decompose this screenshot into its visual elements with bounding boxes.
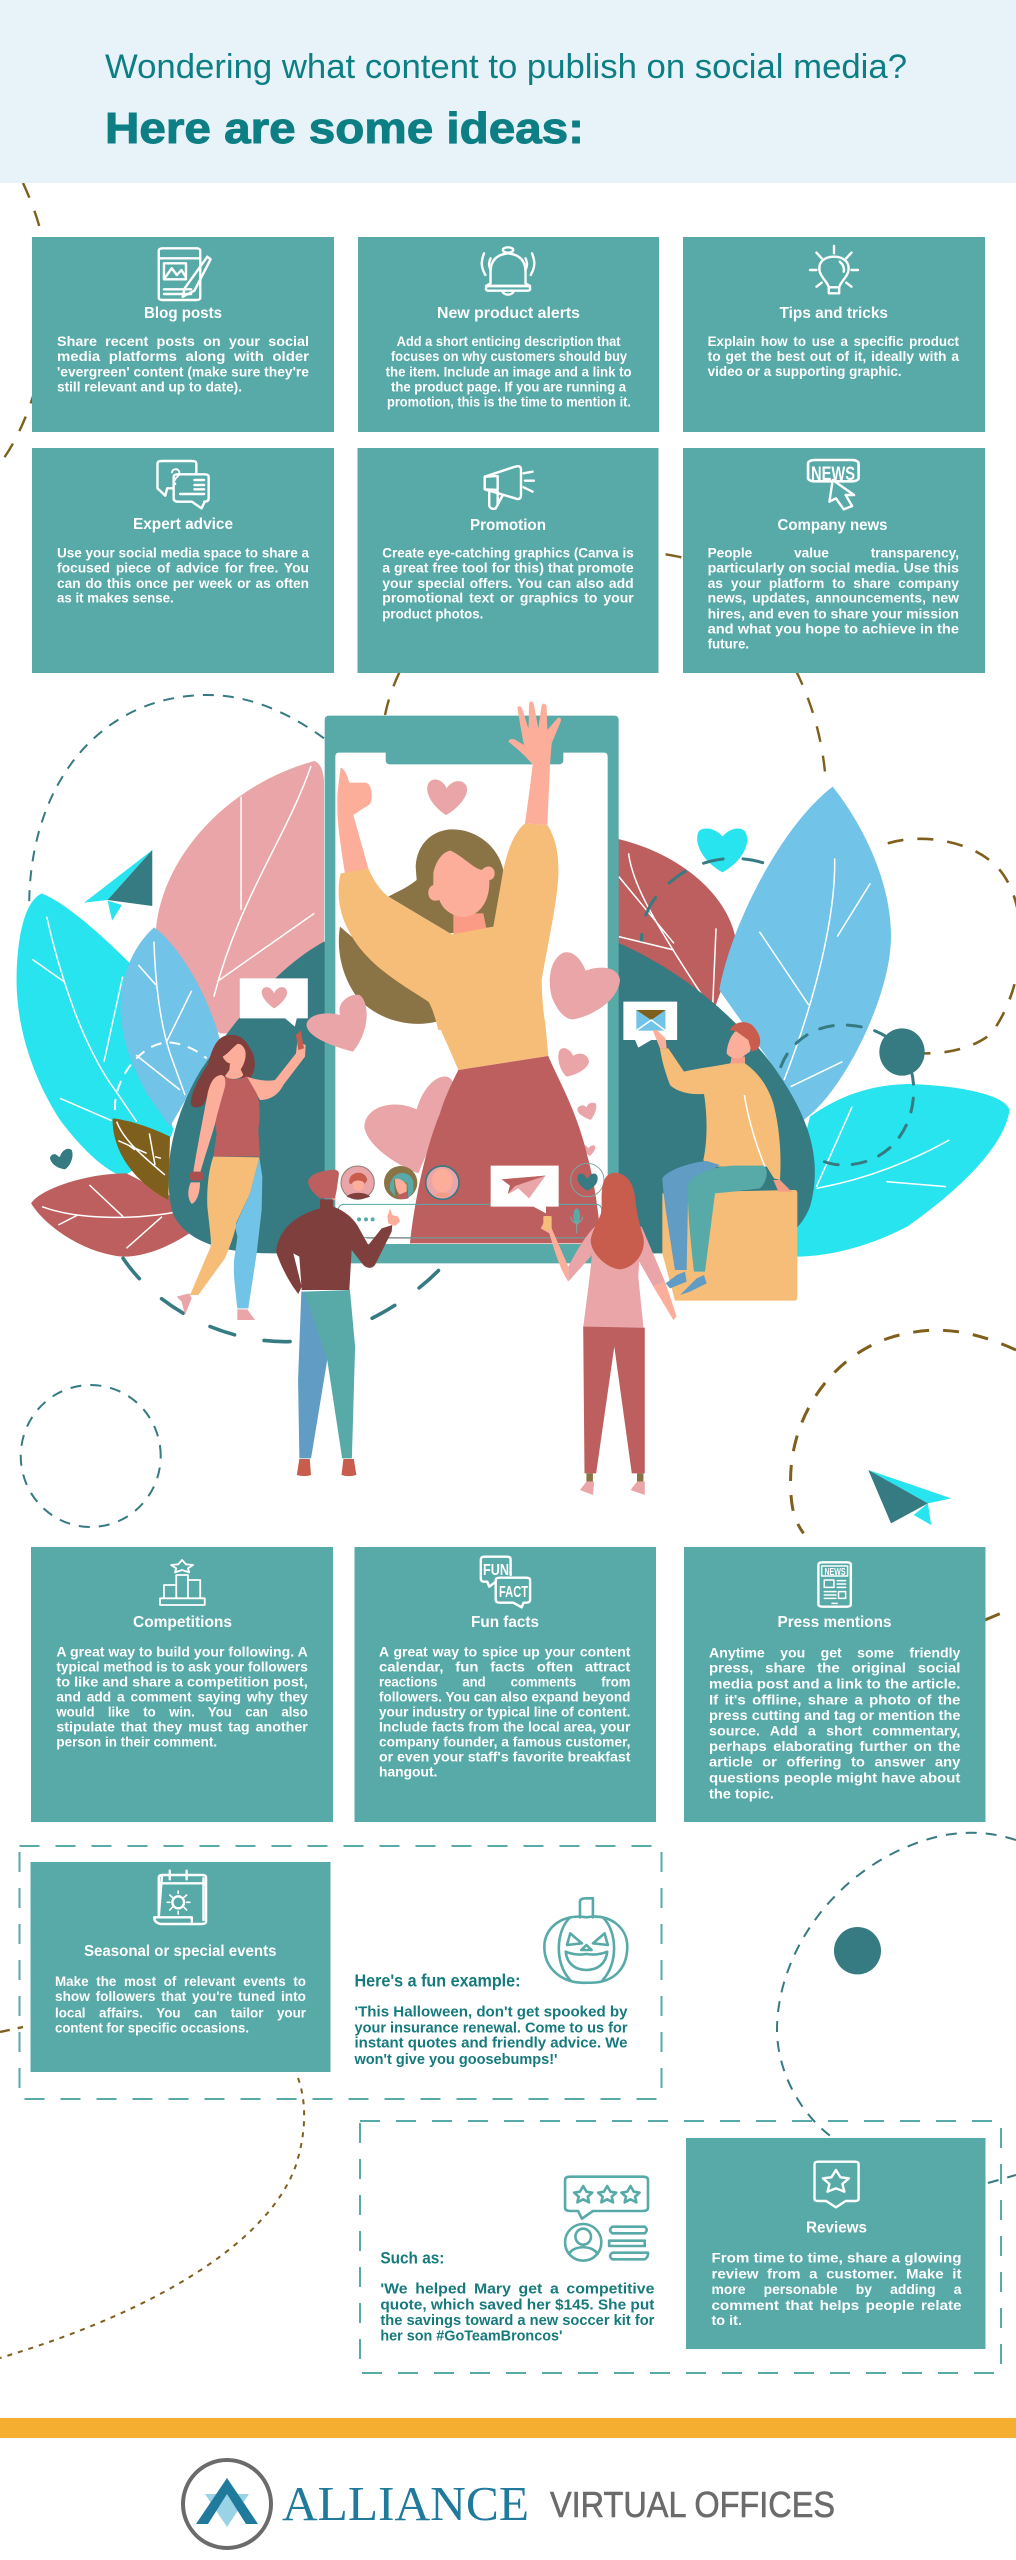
body text: media platforms along with older (57, 349, 310, 364)
leaf: cyan right (794, 1084, 1010, 1257)
teal dot right (879, 1028, 925, 1076)
body text: to like and share a competition post, (56, 1675, 308, 1690)
body text: typical method is to ask your followers (56, 1660, 308, 1675)
panel: blog posts (32, 237, 334, 432)
panel: company news (683, 448, 985, 673)
body text: 'evergreen' content (make sure they're (57, 364, 309, 380)
leaf: red behind phone right (616, 838, 737, 1013)
body text (57, 546, 309, 606)
body text: hangout. (379, 1764, 437, 1779)
body text: Create eye-catching graphics (Canva is (382, 546, 634, 561)
body text: your special offers. You can also add (382, 576, 634, 591)
icon: fun fact bubbles: FUN (483, 1562, 509, 1579)
dashed arc top right (888, 839, 1016, 1053)
footer logo (183, 2460, 835, 2548)
body text (708, 334, 959, 379)
icon: light bulb (810, 246, 858, 293)
heading: Blog posts (144, 305, 222, 322)
small hearts right (558, 1048, 596, 1156)
phone screen (335, 753, 608, 1244)
body text: promotional text or graphics to your (382, 591, 634, 606)
main woman on screen (337, 701, 561, 1030)
body text: Anytime you get some friendly (709, 1645, 961, 1660)
body text: more personable by adding a (712, 2282, 962, 2297)
body text: hires, and even to share your mission (708, 606, 959, 621)
body text: Add a short enticing description that (397, 334, 621, 349)
leaf: cyan left (17, 893, 173, 1177)
leaf: pink large (156, 761, 324, 1033)
body text: A great way to build your following. A (56, 1645, 308, 1660)
example quote: the savings toward a new soccer kit for (380, 2313, 655, 2329)
figure: man seen from behind (276, 1170, 400, 1476)
body text (709, 1645, 961, 1801)
speech bubbles on blob (240, 978, 677, 1048)
body text: as it makes sense. (57, 591, 174, 606)
body text: calendar, fun facts often attract (379, 1660, 631, 1675)
example quote: 'This Halloween, don't get spooked by (354, 2005, 628, 2021)
leaf: dark brown small (113, 1118, 170, 1200)
icon: blog document (159, 248, 211, 300)
panel: press mentions (684, 1547, 986, 1822)
body text (379, 1645, 631, 1779)
logo tagline: VIRTUAL OFFICES (550, 2484, 835, 2525)
body text: review from a customer. Make it (712, 2266, 962, 2281)
body text: a great free tool for this) that promote (382, 561, 634, 576)
body text: Use your social media space to share a (57, 546, 309, 561)
phone notch (386, 750, 563, 764)
paper plane upper left (84, 850, 152, 921)
body text: content for specific occasions. (55, 2020, 249, 2035)
example heading: Such as: (380, 2248, 444, 2267)
example quote (354, 2005, 628, 2068)
body text: your industry or typical line of content. (379, 1704, 630, 1719)
heading: Fun facts (471, 1614, 539, 1631)
body text (712, 2250, 962, 2328)
body text: Make the most of relevant events to (55, 1974, 306, 1989)
body text: media post and a link to the article. (709, 1676, 960, 1691)
background leaves, arcs and planes (21, 695, 1016, 1533)
body text: press, share the original social (709, 1661, 960, 1676)
icon: fun fact bubbles: FACT (499, 1584, 528, 1601)
avatars row (341, 1163, 604, 1199)
heading: Press mentions (778, 1614, 892, 1631)
example heading: Here's a fun example: (354, 1971, 520, 1991)
body text: or even your staff's favorite breakfast (379, 1750, 631, 1765)
panel: competitions (31, 1547, 333, 1822)
body text: stipulate that they must tag another (56, 1720, 309, 1735)
logo mark (183, 2460, 271, 2548)
sweater lower part (437, 1020, 548, 1070)
panel: reviews (686, 2138, 986, 2349)
body text: person in their comment. (56, 1735, 217, 1750)
right leaves, arcs and blobs (123, 787, 1010, 1342)
body text: and add a comment saying why they (56, 1689, 308, 1704)
example quote: won't give you goosebumps!' (354, 2052, 558, 2068)
heading: Reviews (806, 2220, 867, 2237)
speech bubble: envelope (623, 1002, 677, 1048)
header band (0, 0, 1016, 183)
heart: small dark teal (50, 1149, 73, 1169)
heading: New product alerts (437, 305, 580, 322)
brown dashed arc lower right (791, 1330, 1016, 1533)
body text: source. Add a short commentary, (709, 1724, 960, 1739)
body text: People value transparency, (708, 546, 959, 561)
leaf: light blue small (120, 927, 220, 1127)
phone and woman on screen, top part (307, 701, 620, 1263)
body text: to it. (712, 2313, 742, 2328)
body text (386, 334, 632, 410)
heading: Seasonal or special events (84, 1943, 277, 1960)
heart: cyan top right (697, 829, 747, 872)
dashed circle lower left (21, 1385, 161, 1527)
lower screen: skirt, hearts, avatars, bar (338, 1020, 604, 1243)
dashed box: reviews example (360, 2121, 1001, 2373)
body text: Share recent posts on your social (57, 334, 309, 349)
body text: as your platform to share company (708, 576, 959, 591)
body text: article or offering to answer any (709, 1755, 961, 1770)
body text (708, 546, 959, 651)
example quote: quote, which saved her $145. She put (380, 2297, 655, 2313)
example quote: 'We helped Mary get a competitive (380, 2281, 654, 2297)
body text: Explain how to use a specific product (708, 334, 959, 349)
leaf: red lower left (31, 1173, 194, 1257)
body text: show followers that you're tuned into (55, 1989, 306, 2004)
body text: Include facts from the local area, your (379, 1720, 631, 1735)
body text: A great way to spice up your content (379, 1645, 631, 1660)
skirt (410, 1056, 602, 1243)
icon: news tablet: NEWS (824, 1567, 846, 1578)
body text: press cutting and tag or mention the (709, 1708, 961, 1723)
dashed curve by heart (642, 858, 763, 940)
body text: focused piece of advice for free. You (57, 561, 309, 576)
left leaves (17, 893, 220, 1177)
example quote: her son #GoTeamBroncos' (380, 2329, 562, 2345)
example quote: instant quotes and friendly advice. We (354, 2035, 628, 2051)
body text: to get the best out of it, ideally with a (708, 349, 959, 364)
icon: rating bubble and reviewer (565, 2177, 648, 2261)
body text: perhaps elaborating further on the (709, 1739, 961, 1754)
body text (382, 546, 634, 621)
body text: video or a supporting graphic. (708, 364, 902, 379)
big pink heart (364, 1077, 453, 1173)
body text: comment that helps people relate (712, 2298, 962, 2313)
icon: news tablet (818, 1562, 851, 1607)
icon: fun fact bubbles (481, 1557, 530, 1607)
body text: local affairs. You can tailor your (55, 2005, 307, 2020)
body text (57, 334, 310, 394)
body text (55, 1645, 309, 1750)
body text: the topic. (709, 1786, 774, 1801)
figure: woman with red hair (541, 1173, 677, 1495)
icon: bell (482, 247, 534, 295)
body text: promotion, this is the time to mention it. (387, 394, 631, 410)
heading: Expert advice (133, 516, 233, 533)
heading: Tips and tricks (780, 305, 888, 322)
body text: reactions and comments from (379, 1675, 630, 1690)
icon: question speech bubbles: ? (170, 464, 181, 491)
teal dot lower right (834, 1927, 881, 1974)
panel: seasonal or special events (30, 1862, 330, 2072)
icon: question speech bubbles (157, 461, 209, 508)
icon: news button with cursor (808, 460, 859, 509)
body text: future. (708, 636, 749, 651)
speech bubble: heart (240, 978, 308, 1027)
illustration: people around giant phone (17, 695, 1016, 1533)
example quote (380, 2281, 655, 2345)
panel: fun facts (354, 1547, 656, 1822)
body text: company founder, a famous customer, (379, 1735, 630, 1750)
body text: focuses on why customers should buy (391, 349, 627, 364)
example quote: your insurance renewal. Come to us for (354, 2020, 628, 2036)
comment input bar (338, 1204, 602, 1238)
body text: and what you hope to achieve in the (708, 621, 959, 636)
dashed box: seasonal example (20, 1846, 662, 2099)
icon: news button with cursor: NEWS (811, 464, 855, 485)
icon: pumpkin (544, 1898, 627, 1983)
speech bubble: paper plane (491, 1166, 559, 1213)
footer stripe (0, 2418, 1016, 2438)
body text: would like to win. You can also (55, 1704, 308, 1719)
heading: Competitions (133, 1614, 232, 1631)
heart lower left of main woman (307, 995, 367, 1052)
figure: seated man with box (653, 1022, 797, 1301)
body text: followers. You can also expand beyond (379, 1689, 630, 1704)
body text: still relevant and up to date). (57, 380, 242, 394)
panel: tips and tricks (683, 237, 985, 432)
body text: If it's offline, share a photo of the (709, 1692, 961, 1707)
hearts upper screen (427, 779, 620, 1019)
body text (55, 1974, 307, 2035)
body text: product photos. (382, 606, 483, 621)
body text: can do this once per week or as often (57, 576, 309, 591)
panel: new product alerts (358, 237, 659, 432)
body text: news, updates, announcements, new (708, 591, 959, 606)
heading: Promotion (470, 517, 546, 534)
paper plane lower right (868, 1470, 951, 1525)
title line: Wondering what content to publish on social media? (105, 48, 907, 86)
blob: dark teal behind phone (168, 942, 815, 1253)
body text: particularly on social media. Use this (708, 561, 959, 576)
panel: expert advice (32, 448, 334, 673)
icon: podium with star (160, 1560, 205, 1605)
icon: megaphone (485, 466, 534, 509)
body text: From time to time, share a glowing (712, 2250, 962, 2265)
figure: woman with phone (177, 1031, 306, 1320)
heading: Company news (778, 517, 888, 534)
phone body (325, 716, 619, 1263)
logo wordmark: ALLIANCE (282, 2476, 529, 2531)
icon: star bubble (815, 2162, 859, 2207)
body text: questions people might have about (709, 1770, 961, 1785)
main heading: Here are some ideas: (105, 104, 584, 153)
panel: promotion (358, 448, 658, 673)
body text: the product page. If you are running a (391, 380, 626, 394)
body text: the item. Include an image and a link to (386, 364, 632, 380)
dashed circle top left (29, 695, 324, 907)
white dashed arc on leaves (115, 1042, 207, 1110)
dashed circle on leaves right (781, 1025, 914, 1165)
leaf: light blue big (719, 787, 891, 1147)
lower dashed teal arc (123, 1258, 444, 1342)
icon: calendar with sun (154, 1871, 206, 1924)
